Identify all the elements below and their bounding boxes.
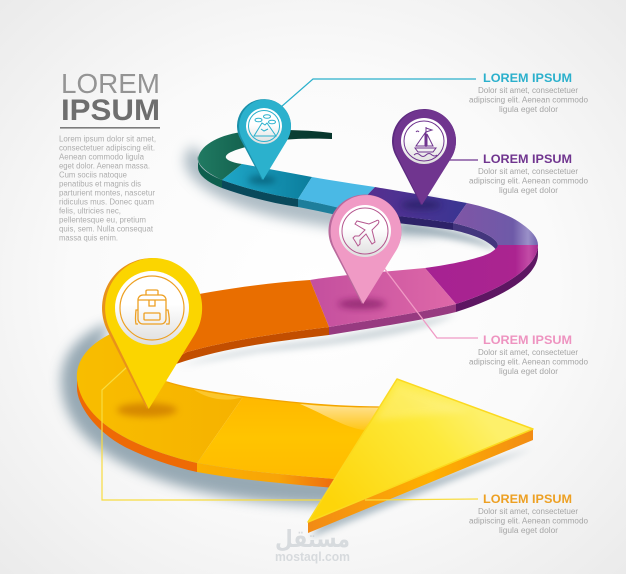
intro paragraph: consectetuer adipiscing elit. xyxy=(59,144,155,152)
label: teal: ligula eget dolor xyxy=(499,105,558,114)
intro paragraph: penatibus et magnis dis xyxy=(59,180,141,188)
ribbon: orange section xyxy=(170,280,329,364)
arrow: yellow body xyxy=(77,328,380,488)
title xyxy=(60,68,160,129)
label: purple: LOREM IPSUM xyxy=(483,152,572,166)
pin: purple boat xyxy=(392,109,456,210)
icon: sailboat xyxy=(414,127,437,156)
ribbon: upper green section xyxy=(198,130,332,188)
label: yellow xyxy=(469,492,589,535)
watermark xyxy=(275,525,350,564)
ribbon: blue section xyxy=(222,164,312,207)
intro paragraph: massa quis enim. xyxy=(59,234,118,242)
label: yellow: LOREM IPSUM xyxy=(483,492,572,506)
label: teal: adipiscing elit. Aenean commodo xyxy=(469,96,589,104)
icon: backpack xyxy=(136,290,169,324)
intro paragraph: ridiculus mus. Donec quam xyxy=(59,198,154,206)
watermark: مستقل xyxy=(275,525,350,553)
title: LOREM xyxy=(61,68,160,99)
pin: pink airplane xyxy=(328,195,401,309)
label: teal: Dolor sit amet, consectetuer xyxy=(478,86,578,95)
label: purple xyxy=(469,152,589,195)
label: yellow: Dolor sit amet, consectetuer xyxy=(478,507,578,516)
label: yellow: adipiscing elit. Aenean commodo xyxy=(469,516,589,526)
label: pink xyxy=(469,333,589,376)
intro paragraph: Aenean commodo ligula xyxy=(59,152,145,162)
ribbon: light purple section xyxy=(453,203,538,251)
pin: teal mountain xyxy=(237,99,291,184)
intro paragraph: quis, sem. Nulla consequat xyxy=(59,224,154,234)
intro paragraph: eget dolor. Aenean massa. xyxy=(59,162,150,170)
intro paragraph: Lorem ipsum dolor sit amet, xyxy=(59,134,156,144)
icon: mountain xyxy=(254,115,276,136)
connector: yellow line xyxy=(102,367,478,500)
arrow: head xyxy=(308,379,533,533)
label: teal xyxy=(469,71,589,114)
ribbon: pink section xyxy=(310,268,456,335)
watermark: mostaql.com xyxy=(275,549,350,564)
label: pink: adipiscing elit. Aenean commodo xyxy=(469,358,589,366)
intro paragraph: Cum sociis natoque xyxy=(59,170,128,180)
label: yellow: ligula eget dolor xyxy=(499,526,558,535)
label: purple: Dolor sit amet, consectetuer xyxy=(478,167,578,176)
ribbon: magenta section xyxy=(425,245,538,312)
intro paragraph: parturient montes, nascetur xyxy=(59,188,155,198)
label: purple: ligula eget dolor xyxy=(499,186,558,195)
intro paragraph: felis, ultricies nec, xyxy=(59,206,121,216)
connector: teal line xyxy=(281,79,476,107)
label: teal: LOREM IPSUM xyxy=(483,71,572,85)
label: pink: LOREM IPSUM xyxy=(483,333,572,347)
label: pink: ligula eget dolor xyxy=(499,367,558,376)
icon: airplane xyxy=(353,220,379,246)
ribbon shadows xyxy=(61,146,533,538)
title: IPSUM xyxy=(61,94,160,127)
label: pink: Dolor sit amet, consectetuer xyxy=(478,348,578,357)
ribbon: light blue section xyxy=(298,177,375,218)
intro paragraph xyxy=(59,134,156,242)
ribbon: dark purple section xyxy=(352,187,467,230)
connector: pink line xyxy=(384,268,478,338)
label: purple: adipiscing elit. Aenean commodo xyxy=(469,176,589,186)
intro paragraph: pellentesque eu, pretium xyxy=(59,216,146,224)
connector: purple line xyxy=(449,159,478,161)
pin: yellow backpack xyxy=(102,258,202,417)
